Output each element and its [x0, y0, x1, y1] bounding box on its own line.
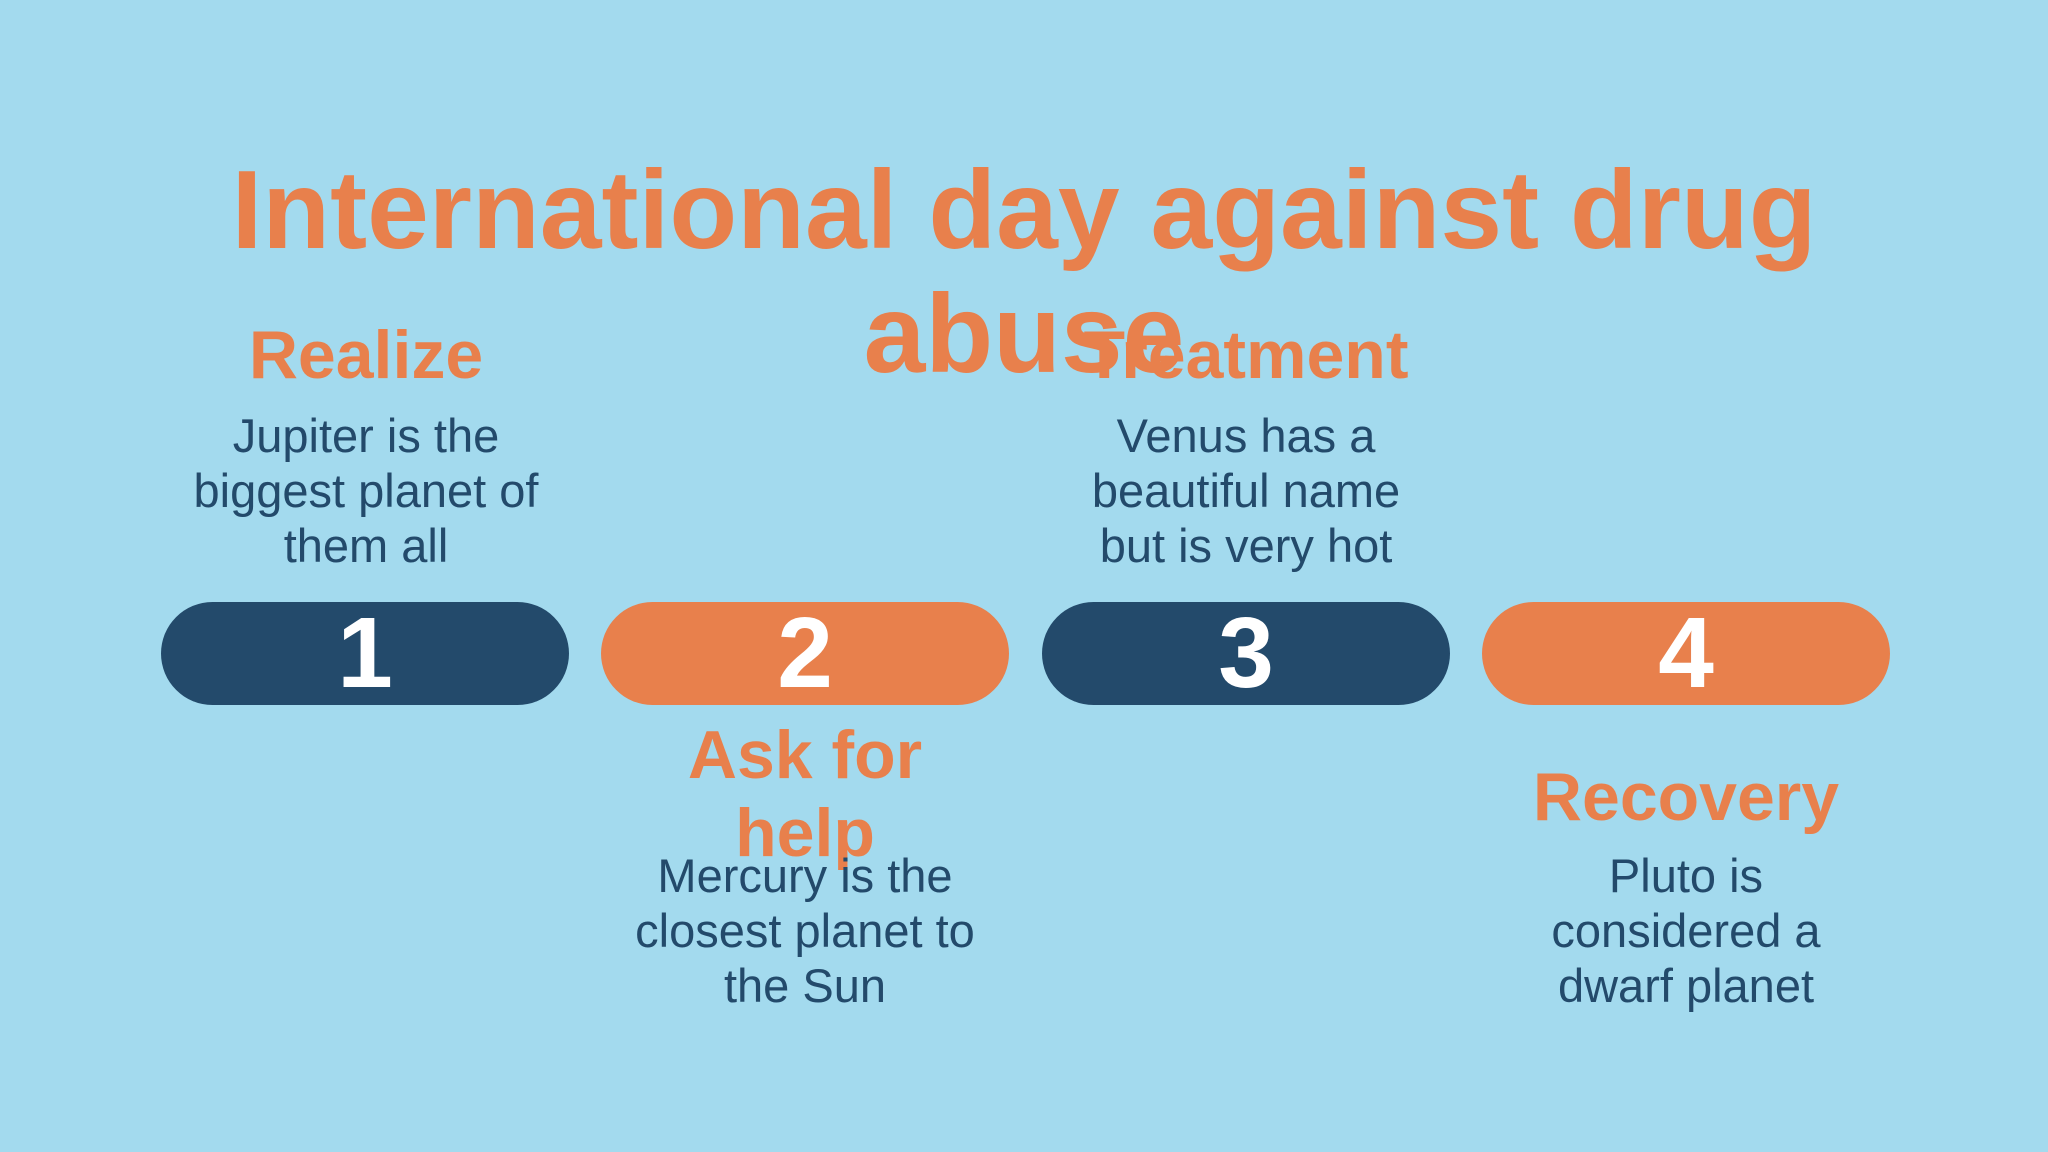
title: abuse [864, 272, 1184, 396]
title [231, 148, 1817, 396]
text: Treatment: beautiful name [1092, 464, 1400, 517]
text: Ask for help: Mercury is the [657, 849, 953, 902]
pill 2 [601, 602, 1009, 705]
text: Ask for help: closest planet to [635, 904, 975, 957]
pill 4: 4 [1658, 597, 1714, 709]
text: Recovery: Pluto is [1609, 849, 1763, 902]
heading: Realize: Realize [249, 317, 483, 393]
text: Recovery: considered a [1551, 904, 1821, 957]
heading: Treatment: Treatment [1084, 317, 1408, 393]
text: Realize: Jupiter is the [233, 409, 499, 462]
pill 2: 2 [777, 597, 833, 709]
text: Realize: biggest planet of [194, 464, 538, 517]
text: Recovery [1551, 849, 1821, 1012]
text: Treatment: Venus has a [1117, 409, 1375, 462]
text: Ask for help: the Sun [724, 959, 886, 1012]
pill 1 [161, 602, 569, 705]
pill 4 [1482, 602, 1890, 705]
text: Realize [194, 409, 538, 572]
text: Realize: them all [284, 519, 448, 572]
heading: Ask for help [688, 717, 922, 871]
pill 1: 1 [337, 597, 393, 709]
heading: Ask for help: Ask for [688, 717, 922, 793]
text: Treatment [1092, 409, 1400, 572]
heading: Ask for help: help [735, 795, 875, 871]
text: Recovery: dwarf planet [1558, 959, 1814, 1012]
title: International day against drug [231, 148, 1817, 272]
heading: Recovery: Recovery [1533, 759, 1839, 835]
text: Treatment: but is very hot [1100, 519, 1392, 572]
pill 3: 3 [1218, 597, 1274, 709]
text: Ask for help [635, 849, 975, 1012]
pill 3 [1042, 602, 1450, 705]
